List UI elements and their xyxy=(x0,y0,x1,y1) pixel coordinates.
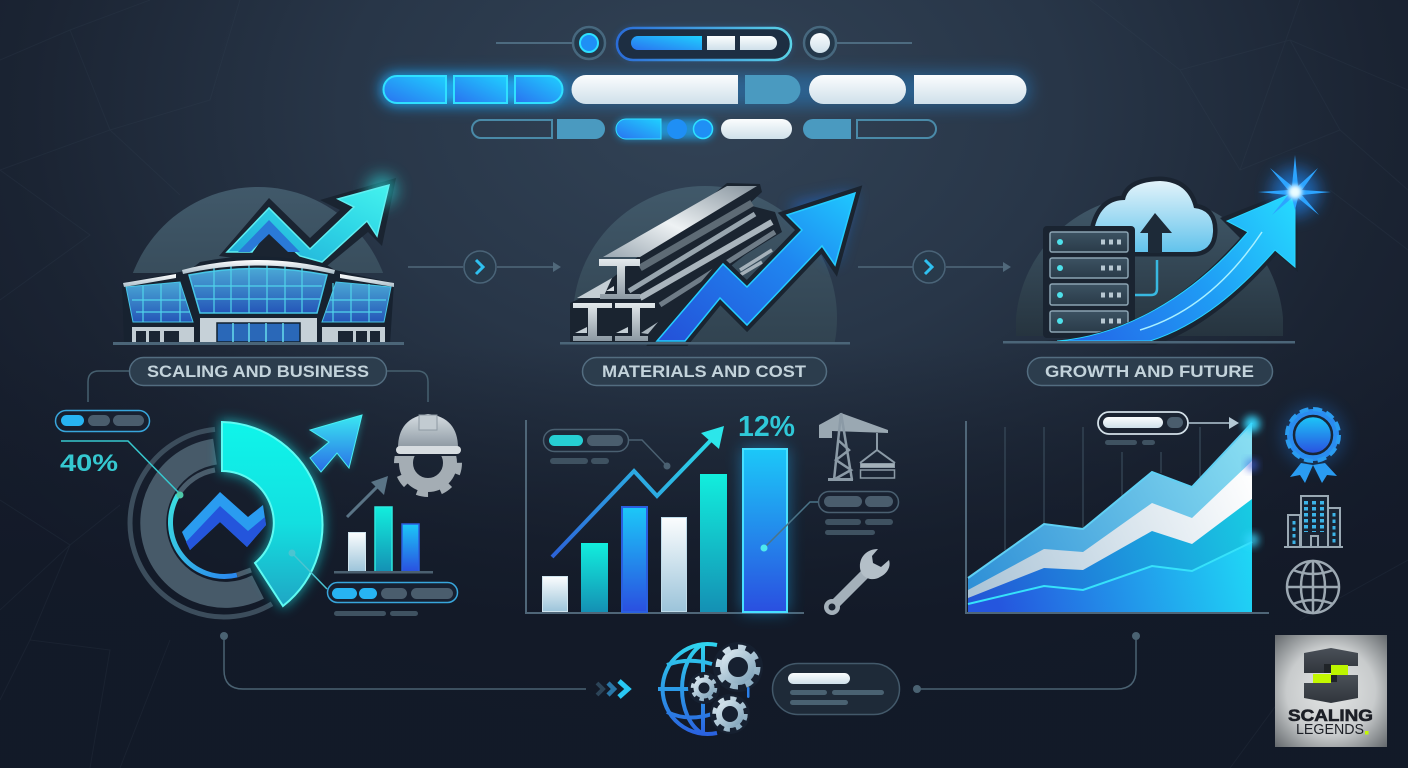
trend arrow xyxy=(552,426,724,557)
icon: glowing star xyxy=(1258,155,1331,215)
heading: materials and cost: MATERIALS AND COST xyxy=(602,363,806,381)
value: 12 percent: 12% xyxy=(738,411,795,443)
callout: bottom pill xyxy=(772,664,900,714)
icon: servers, cloud and growth arrow xyxy=(1003,168,1319,345)
top decorative pill rows xyxy=(380,27,1030,139)
icon: logo cube mark xyxy=(1304,648,1358,703)
logo: Scaling Legends: SCALING xyxy=(1288,707,1373,725)
icon: wrench xyxy=(824,549,890,615)
panel: donut chart xyxy=(56,410,461,617)
callout: upper-left pill xyxy=(544,430,670,470)
arrow: business to materials xyxy=(408,251,561,283)
logo: Scaling Legends xyxy=(1275,635,1387,747)
icon: chevrons xyxy=(597,681,628,697)
value: 40 percent: 40% xyxy=(60,450,118,477)
icon: wireframe globe xyxy=(1287,561,1339,613)
heading: scaling and business xyxy=(130,358,386,386)
callout: 40 percent pill xyxy=(56,410,184,498)
donut rings xyxy=(130,429,272,617)
icon: tower crane xyxy=(819,413,895,481)
icon: rising arrow xyxy=(310,415,362,472)
icon: steel beams with rising arrow xyxy=(560,183,862,346)
small bar chart xyxy=(334,476,433,574)
heading: materials and cost xyxy=(582,358,826,386)
logo: Scaling Legends: LEGENDS xyxy=(1296,721,1364,738)
flow line: bottom connectors xyxy=(220,632,1140,693)
arrow: materials to growth xyxy=(858,251,1011,283)
icon: globe and gears xyxy=(658,642,763,734)
stacked areas xyxy=(968,416,1260,612)
panel: bar chart with 12 percent xyxy=(526,411,898,615)
callout: right pill xyxy=(760,492,898,552)
donut cyan sector xyxy=(222,422,327,606)
icon: ribbon badge xyxy=(1281,403,1345,483)
heading: growth and future: GROWTH AND FUTURE xyxy=(1045,363,1254,381)
icon: office building xyxy=(1284,496,1343,548)
panel: area chart xyxy=(966,403,1345,613)
icon: helmet and gear xyxy=(396,414,461,493)
heading: growth and future xyxy=(1028,358,1272,386)
icon: building with rising arrow xyxy=(113,166,406,345)
callout: donut pill xyxy=(328,582,458,616)
bars xyxy=(542,448,788,612)
callout: area chart pill xyxy=(1098,412,1239,445)
heading: scaling and business: SCALING AND BUSINESS xyxy=(147,363,369,381)
icon: inner mountain line xyxy=(182,492,266,550)
